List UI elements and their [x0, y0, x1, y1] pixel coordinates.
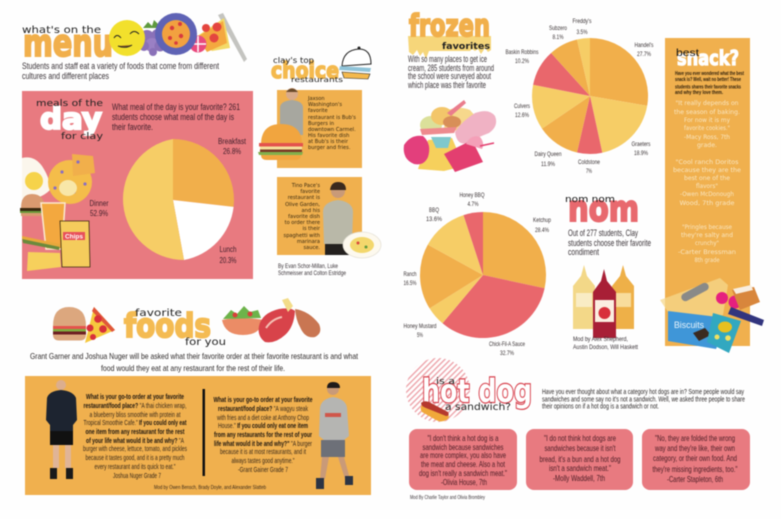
quote card: Carter Stapleton: category, or their own food. And: [653, 454, 737, 463]
text: Joshua's answer: one item from any restaurant for the rest: [86, 427, 185, 436]
byline: condiments: Austin Dodson, Will Haskett: [573, 344, 638, 351]
text: meal question: their favorite.: [112, 122, 153, 132]
panel: best snack: [665, 38, 750, 346]
quotes: snack answers: "It really depends on: [676, 100, 739, 107]
heading: meals of the day for clay: for clay: [61, 132, 104, 142]
text: snack intro: and why they love them.: [675, 90, 724, 96]
heading: is a hot dog a sandwich: hot dog: [422, 372, 532, 410]
photo: Tino: [323, 182, 353, 255]
byline: restaurants: By Evan Schor-Millan, Luke: [278, 263, 338, 270]
text: Jaxson's favorite: favorite: [308, 108, 328, 114]
icon: serving cloche: [339, 46, 371, 79]
heading: frozen favorites: frozen: [409, 9, 490, 44]
pie chart: favorite meal: Lunch: [220, 245, 236, 254]
icon: burger: [258, 124, 303, 160]
text: Jaxson's favorite: Washington's: [308, 102, 342, 108]
heading: meals of the day for clay: meals of the: [36, 99, 104, 109]
pie chart: condiments: BBQ: [429, 207, 439, 214]
text: Grant's answer: always tastes good anytime.": [232, 456, 295, 465]
icon: burger and pizza: [53, 307, 115, 343]
quotes: snack answers: grade.: [697, 142, 717, 149]
card: Jaxson Washington: [258, 88, 362, 168]
text: Tino's favorite: favorite: [300, 189, 320, 195]
pie chart: ice cream: Baskin Robbins: [506, 49, 539, 56]
text: frozen intro: cream, 285 students from around: [408, 63, 494, 73]
text: favorite foods intro: [30, 351, 359, 373]
text: meal question: students choose what meal of the day is: [112, 112, 234, 122]
quote card: Olivia House: "I don't think a hot dog is a: [428, 434, 499, 443]
quote card: Molly Waddell: sandwiches because it isn't: [544, 444, 616, 453]
quote card: Olivia House: the meat and cheese. Also a hot: [421, 460, 506, 469]
pie chart: favorite meal: 20.3%: [220, 256, 236, 265]
pie chart: favorite meal: 52.9%: [90, 209, 108, 218]
text: snack intro: snack is? Well, wait no better! These: [675, 77, 741, 83]
text: Grant's answer: from any restaurants for the rest of your: [214, 430, 312, 439]
quotes: snack answers: [673, 100, 741, 264]
quote card: Olivia House: sandwich because sandwiches: [422, 443, 504, 452]
quote card: Carter Stapleton: [642, 429, 750, 490]
pie chart: ice cream: [506, 18, 654, 175]
text: Tino's favorite: restaurant is: [288, 195, 320, 201]
text: Tino's favorite: spaghetti with: [284, 233, 320, 239]
text: Joshua's answer: [83, 392, 187, 480]
text: hot dog intro: [542, 389, 745, 410]
heading: favorite foods for you: for you: [185, 337, 226, 348]
photo: Joshua: [46, 380, 77, 479]
quotes: snack answers: -Macy Ross, 7th: [684, 134, 730, 141]
text: Joshua's answer: of your life what would it be and why? "A: [86, 436, 184, 445]
quotes: snack answers: crunchy": [695, 240, 719, 247]
quote card: Carter Stapleton: way and they're like, their own: [654, 444, 735, 453]
icon: hot dog: [421, 401, 449, 422]
quotes: snack answers: "Pringles because: [682, 224, 732, 231]
text: Tino's favorite: and his: [302, 208, 320, 214]
byline: condiments: Mod by Alex Shepherd,: [573, 336, 628, 343]
photo: Grant: [316, 382, 353, 489]
pie chart: ice cream: Dairy Queen: [534, 151, 562, 158]
text: Tino's favorite: favorite dish: [288, 214, 320, 220]
quote card: Carter Stapleton: they're missing ingredients, too.": [652, 465, 738, 474]
pie chart: condiments: Ranch: [404, 271, 417, 278]
text: Jaxson's favorite: His favorite dish: [308, 133, 349, 139]
pie chart: ice cream: 27.7%: [637, 51, 651, 58]
quote card: Molly Waddell: [526, 429, 633, 490]
text: Joshua's answer: a blueberry bliss smoothie with protein at: [90, 410, 180, 419]
heading: clay's top choice restaurants: choice: [271, 59, 339, 84]
pie chart: condiments: [404, 192, 551, 357]
quote card: Olivia House: dog isn't really a sandwich meat.": [419, 469, 507, 478]
text: meal question: What meal of the day is your favorite? 261: [112, 102, 240, 112]
quote card: Olivia House: are more complex, you also have: [420, 451, 506, 460]
text: Joshua's answer: burger with cheese, lettuce, tomato, and pickles: [83, 444, 187, 453]
quote card: Carter Stapleton: -Carter Stapleton, 6th: [667, 475, 723, 484]
text: Jaxson's favorite: Burgers in: [308, 121, 334, 127]
text: snack intro: students shares their favorite snacks: [675, 84, 741, 90]
text: Grant's answer: because it is at most restaurants, and it: [220, 447, 306, 456]
quotes: snack answers: best one of the: [684, 175, 730, 182]
quote card: Carter Stapleton: "No, they are folded the wrong: [655, 434, 735, 443]
text: Joshua's answer: What is your go-to order at your favorite: [86, 392, 184, 401]
text: favorite foods intro: food would they eat at any restaurant for the rest of their life.: [101, 363, 285, 373]
heading: is a hot dog a sandwich: [406, 358, 532, 422]
byline: orders: Mod by Owen Bensch, Brady Doyle, and Alexander Slatteb: [154, 485, 266, 491]
heading: is a hot dog a sandwich: is a: [436, 377, 455, 387]
text: Tino's favorite: [284, 183, 321, 251]
text: Grant's answer: with fries and a diet coke at Anthony Chop: [216, 413, 309, 422]
heading: frozen favorites: favorites: [442, 42, 490, 52]
title: what's on the menu: menu: [23, 22, 113, 65]
pie chart: condiments: 4.7%: [468, 201, 478, 208]
text: Tino's favorite: to order there: [285, 220, 320, 226]
pie chart: favorite meal: [90, 137, 247, 265]
text: Tino's favorite: Tino Pace's: [291, 183, 320, 189]
pie chart: ice cream: 10.2%: [515, 58, 529, 65]
text: condiment intro: condiment: [568, 247, 599, 257]
quote card: Molly Waddell: bread, it's a bun and a hot dog: [540, 455, 621, 464]
text: menu intro: cultures and different places: [22, 71, 109, 81]
pie chart: favorite meal: Breakfast: [218, 137, 247, 146]
quote card: Molly Waddell: "I do not think hot dogs are: [544, 434, 616, 443]
text: Jaxson's favorite: at Bub's is their: [308, 139, 349, 145]
heading: favorite foods for you: favorite: [135, 308, 182, 319]
card: Tino Pace: [277, 177, 381, 258]
quotes: snack answers: favorite cookies.": [684, 125, 730, 132]
quotes: snack answers: the season of baking.: [674, 109, 740, 116]
text: Tino's favorite: sauce.: [303, 245, 320, 251]
heading: is a hot dog a sandwich: a sandwich?: [445, 402, 511, 413]
text: Grant's answer: restaurant/food place? "A wagyu steak: [218, 404, 308, 413]
quotes: snack answers: because they are the: [673, 167, 741, 174]
heading: meals of the day for clay: day: [40, 102, 102, 136]
text: hot dog intro: their opinions on if a hot dog is a sandwich or not.: [542, 404, 659, 410]
text: Grant's answer: What is your go-to order at your favorite: [214, 395, 313, 404]
heading: nom nom nom: nom nom: [565, 195, 615, 205]
byline: condiments: [573, 336, 638, 351]
quotes: snack answers: -Owen McDonough: [680, 191, 734, 198]
text: Joshua's answer: Tropical Smoothie Cafe." If you could only eat: [84, 418, 187, 427]
quotes: snack answers: For now it is my: [684, 117, 730, 124]
text: condiment intro: students choose their favorite: [568, 238, 651, 248]
quote card: Olivia House: -Olivia House, 7th: [441, 478, 487, 487]
text: condiment intro: Out of 277 students, Clay: [568, 228, 638, 238]
icon: menu food collage: [109, 13, 247, 62]
panel: meals of the day: [20, 91, 253, 279]
text: Jaxson's favorite: downtown Carmel.: [308, 127, 356, 133]
text: Grant's answer: life what would it be and why?" "A burger: [214, 439, 312, 448]
icon: meal food collage: [20, 154, 95, 271]
icon: salad, steak and chicken: [222, 298, 320, 342]
text: frozen intro: the school were surveyed about: [408, 71, 491, 81]
text: Jaxson's favorite: [307, 96, 356, 151]
pie chart: favorite meal: 26.8%: [223, 147, 241, 156]
heading: frozen favorites: [408, 9, 491, 59]
pie chart: ice cream: 12.6%: [515, 112, 529, 119]
pie chart: ice cream: Freddy's: [572, 18, 592, 25]
pie chart: condiments: 5%: [417, 332, 423, 339]
title: what's on the menu: what's on the: [22, 25, 101, 36]
pie chart: ice cream: Graeters: [632, 141, 651, 148]
photo: Jaxson: [280, 88, 303, 135]
heading: meals of the day for clay: [36, 99, 104, 142]
pie chart: ice cream: Subzero: [549, 25, 567, 32]
text: Joshua's answer: every restaurant and its quick to eat.": [94, 462, 176, 471]
pie chart: condiments: Honey Mustard: [404, 323, 437, 330]
pie chart: condiments: 16.5%: [404, 280, 416, 287]
pie chart: ice cream: 3.5%: [576, 29, 588, 36]
pie chart: condiments: Ketchup: [533, 217, 551, 224]
text: Tino's favorite: is their: [302, 226, 321, 232]
text: Jaxson's favorite: Jaxson: [307, 96, 325, 102]
icon: snack pile: Biscuits: [674, 320, 704, 330]
text: Grant's answer: [214, 395, 313, 474]
quotes: snack answers: flavors": [696, 183, 718, 190]
pie chart: condiments: 13.6%: [426, 216, 442, 223]
pie chart: condiments: Chick-Fil-A Sauce: [489, 341, 525, 348]
quote card: Molly Waddell: -Molly Waddell, 7th: [553, 474, 605, 483]
text: frozen intro: With so many places to get ice: [408, 54, 487, 64]
byline: restaurants: [278, 263, 346, 277]
byline: hot dog: Mod By Charlie Taylor and Olivia Brombley: [410, 495, 485, 501]
text: snack intro: Have you ever wondered what the best: [675, 71, 744, 77]
pie chart: ice cream: Handel's: [634, 42, 654, 49]
pie chart: ice cream: 11.9%: [541, 161, 555, 168]
pie chart: condiments: Honey BBQ: [460, 192, 484, 199]
pie chart: ice cream: 8.1%: [552, 34, 564, 41]
pie chart: ice cream: Culvers: [514, 103, 530, 110]
quotes: snack answers: "Cool ranch Doritos: [676, 159, 738, 166]
text: Jaxson's favorite: burger and fries.: [308, 145, 351, 151]
quote card: Molly Waddell: isn't a sandwich meat.": [549, 464, 611, 473]
text: Joshua's answer: Joshua Nuger Grade 7: [113, 471, 161, 480]
pie chart: ice cream: 7%: [586, 168, 592, 175]
pie chart: condiments: 28.4%: [535, 227, 549, 234]
text: favorite foods intro: Grant Garner and Joshua Nuger will be asked what their favorite order at their favorite restaurant is and what: [30, 351, 359, 361]
text: meal question: [112, 102, 240, 132]
pie chart: ice cream: Coldstone: [578, 159, 600, 166]
quotes: snack answers: 8th grade: [694, 257, 720, 264]
quotes: snack answers: they're salty and: [681, 232, 733, 239]
quotes: snack answers: Wood, 7th grade: [680, 200, 735, 207]
icon: meal food collage: Chips: [65, 234, 84, 240]
text: snack intro: [675, 71, 744, 96]
text: frozen intro: [407, 54, 494, 90]
quotes: snack answers: -Carter Bressman: [678, 249, 736, 256]
text: Joshua's answer: because it tastes good, and it is a pretty much: [86, 453, 184, 462]
heading: favorite foods for you: foods: [124, 306, 211, 345]
heading: nom nom nom: nom: [568, 189, 639, 230]
pie chart: favorite meal: Dinner: [90, 199, 109, 208]
text: Joshua's answer: restaurant/food place? "A thai chicken wrap,: [84, 401, 186, 410]
text: Grant's answer: House." If you could only eat one item: [218, 421, 308, 430]
text: Tino's favorite: Olive Garden,: [285, 202, 320, 208]
heading: best snack: snack?: [677, 46, 739, 70]
heading: clay's top choice restaurants: clay's top: [273, 56, 314, 65]
quote card: Olivia House: [409, 429, 517, 490]
text: frozen intro: which place was their favorite: [407, 80, 486, 90]
pie chart: ice cream: 18.9%: [634, 150, 648, 157]
icon: snack pile: [660, 278, 764, 353]
text: Tino's favorite: marinara: [297, 239, 320, 245]
text: menu intro: Students and staff eat a variety of foods that come from different: [22, 61, 219, 71]
panel: go-to orders: [25, 376, 371, 495]
text: Jaxson's favorite: restaurant is Bub's: [308, 115, 356, 121]
icon: spaghetti plate: [343, 232, 381, 258]
pie chart: condiments: 32.7%: [500, 350, 514, 357]
text: menu intro: [22, 61, 219, 81]
icon: ice cream collage: [404, 100, 496, 172]
text: Grant's answer: -Grant Gainer Grade 7: [238, 465, 288, 474]
heading: best snack: best: [676, 48, 699, 59]
icon: condiment bottles: [573, 265, 634, 338]
heading: clay's top choice restaurants: restaurants: [291, 76, 343, 84]
text: condiment intro: [568, 228, 651, 257]
byline: restaurants: Schmeisser and Colton Estridge: [278, 270, 346, 277]
